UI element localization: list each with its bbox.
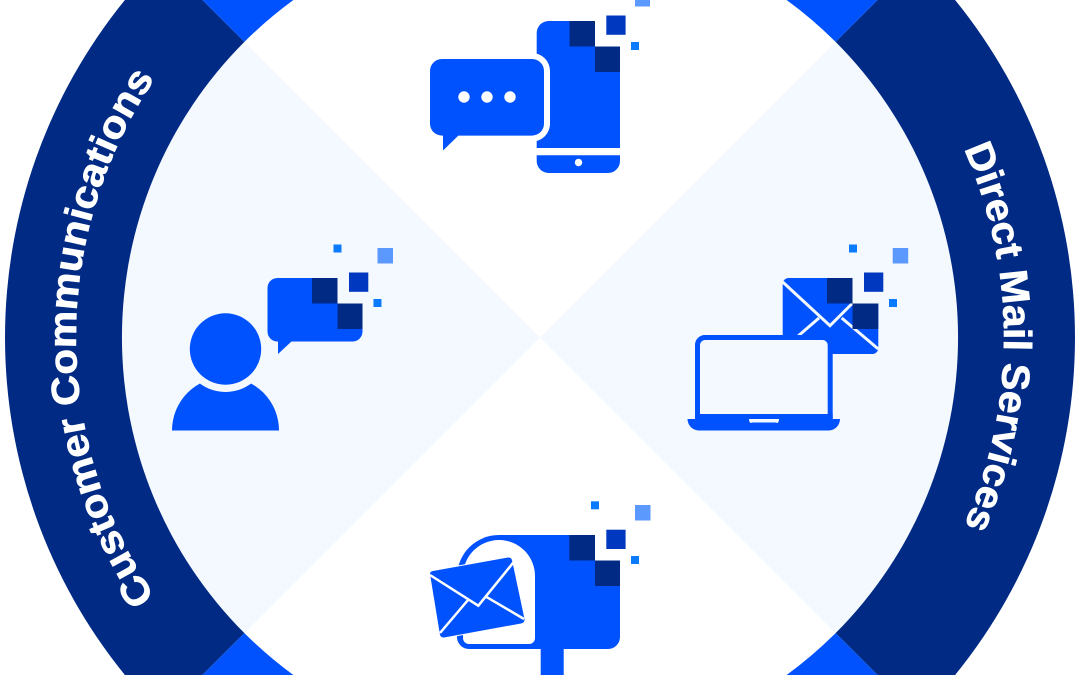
icon: laptop with envelope: [688, 244, 908, 430]
icon: person with speech bubble: [172, 244, 393, 430]
ring: bottom bright segment: [202, 633, 878, 675]
ring: left dark segment: [5, 0, 244, 675]
icon: mailbox with envelope: [430, 501, 650, 675]
quadrant: right panel: [540, 42, 958, 633]
label: Customer Communications: Customer Communications: [51, 71, 152, 606]
quadrant: left panel: [122, 42, 540, 633]
icon: smartphone with chat bubble: [424, 0, 650, 173]
label: Direct Mail Services: Direct Mail Services: [964, 140, 1033, 530]
ring: right dark segment: [836, 0, 1075, 675]
ring: top bright segment: [202, 0, 878, 42]
